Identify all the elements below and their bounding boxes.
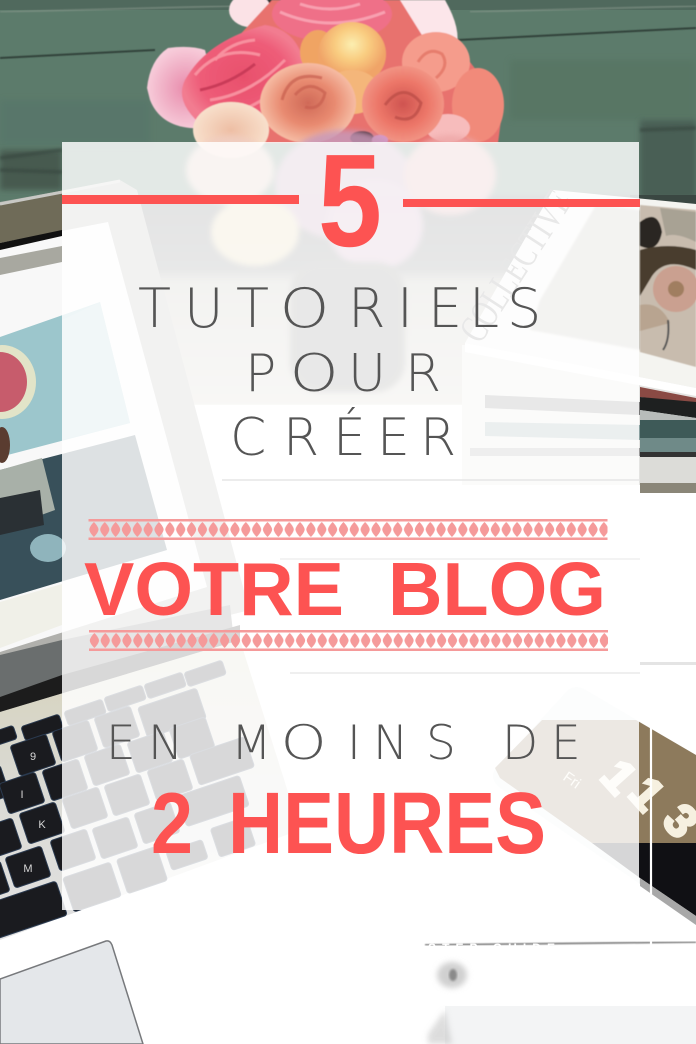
screen photo: fig on teal <box>0 302 130 463</box>
screen photo: cup on dark water <box>0 435 167 648</box>
heading: tutoriels pour créer: TUT <box>138 277 269 340</box>
trackpad <box>0 941 143 1044</box>
key labels: K <box>38 819 46 831</box>
laptop lid <box>0 180 250 672</box>
ornamental band top <box>88 519 608 540</box>
laptop base with keyboard <box>0 605 445 1044</box>
translucent white panel <box>62 142 639 910</box>
heading: votre blog: VOTRE <box>84 547 344 631</box>
divider line left <box>62 195 299 204</box>
heading: tutoriels pour créer: UR <box>348 344 441 404</box>
number 5: 5 <box>318 127 382 274</box>
phone clock digits: 1 <box>619 767 675 821</box>
faded guide text on desk: STEP GUIDE <box>428 941 555 955</box>
back area behind vase <box>62 195 640 405</box>
heading: en moins de: INS DE <box>347 716 581 771</box>
heading: tutoriels pour créer: O <box>290 344 339 404</box>
flowers behind panel <box>186 130 496 270</box>
magazine cover title: COLLECTIVE <box>450 181 581 350</box>
white wash over lower laptop <box>0 835 445 1044</box>
phone clock digits: 1 <box>591 750 647 804</box>
vase <box>290 262 405 392</box>
keyboard keys <box>0 660 256 945</box>
heading: tutoriels pour créer: RIELS <box>348 277 541 340</box>
phone clock digits <box>560 750 696 848</box>
heading: votre blog: BLOG <box>388 547 606 631</box>
heading: tutoriels pour créer: CRÉER <box>230 407 456 468</box>
heading: tutoriels pour créer <box>138 277 541 468</box>
flower bouquet <box>147 0 504 158</box>
heading: 2 heures: HEURES <box>228 775 546 872</box>
white desk <box>0 405 696 1044</box>
magazine cover <box>465 190 696 388</box>
desk lower planks <box>425 662 696 1044</box>
key labels <box>20 751 46 875</box>
wood planks wall <box>0 0 696 240</box>
heading: 2 heures: 2 <box>151 776 193 872</box>
thin white frame <box>444 716 651 1004</box>
key labels: 9 <box>30 751 36 763</box>
heading: tutoriels pour créer: P <box>245 344 276 404</box>
heading: en moins de: EN M <box>106 716 272 771</box>
divider line right <box>403 199 640 207</box>
phone clock digits: Fri <box>560 768 584 792</box>
desk highlights under panel <box>222 479 640 674</box>
magazine floral artwork <box>640 205 696 367</box>
key labels: M <box>23 863 33 875</box>
heading: tutoriels pour créer: O <box>280 277 330 340</box>
key labels: I <box>20 789 24 801</box>
heading: en moins de: O <box>281 716 327 771</box>
magazine stack <box>450 181 696 493</box>
phone <box>493 687 696 925</box>
heading: votre blog <box>84 547 606 631</box>
ornamental band bottom <box>89 630 608 651</box>
